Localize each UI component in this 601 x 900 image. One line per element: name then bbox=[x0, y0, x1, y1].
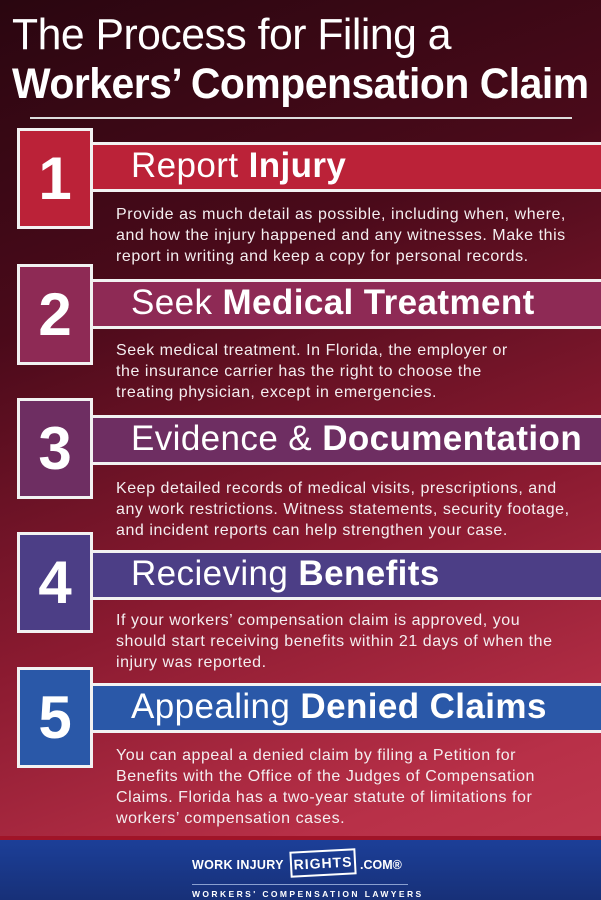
text 3 bbox=[116, 480, 570, 539]
text 5: You can appeal a denied claim by filing a Petition for bbox=[116, 747, 516, 764]
text 3: and incident reports can help strengthen your case. bbox=[116, 522, 508, 539]
number 4 bbox=[17, 532, 93, 633]
step 3 bbox=[17, 398, 601, 539]
text 2: the insurance carrier has the right to choose the bbox=[116, 363, 482, 380]
header bar 2 bbox=[93, 279, 601, 329]
title: Workers’ Compensation Claim bbox=[12, 60, 589, 108]
number 5 bbox=[17, 667, 93, 768]
step 2 bbox=[17, 264, 601, 401]
text 5: Benefits with the Office of the Judges of Compensation bbox=[116, 768, 535, 785]
text 4 bbox=[116, 612, 553, 671]
text 4: injury was reported. bbox=[116, 654, 267, 671]
text 5: Claims. Florida has a two-year statute of limitations for bbox=[116, 789, 532, 806]
text 1 bbox=[116, 206, 566, 265]
text 4: should start receiving benefits within 21 days of when the bbox=[116, 633, 553, 650]
text 5: workers’ compensation cases. bbox=[116, 810, 345, 827]
step 1 bbox=[17, 128, 601, 265]
number 3: 3 bbox=[38, 415, 72, 482]
logo: WORK INJURY bbox=[192, 858, 284, 872]
header bar 1 bbox=[93, 142, 601, 192]
logo: RIGHTS bbox=[293, 853, 353, 873]
header bar 4: Recieving Benefits bbox=[131, 554, 440, 593]
header bar 4 bbox=[93, 550, 601, 600]
number 4: 4 bbox=[38, 549, 72, 616]
header bar 5: Appealing Denied Claims bbox=[131, 687, 547, 726]
header bar 1: Report Injury bbox=[131, 146, 346, 185]
number 5: 5 bbox=[38, 684, 72, 751]
logo bbox=[192, 848, 424, 899]
logo: .COM® bbox=[360, 858, 402, 872]
step 4 bbox=[17, 532, 601, 671]
number 2 bbox=[17, 264, 93, 365]
header bar 5 bbox=[93, 683, 601, 733]
title: The Process for Filing a bbox=[12, 10, 451, 59]
header bar 3: Evidence & Documentation bbox=[131, 419, 582, 458]
number 2: 2 bbox=[38, 281, 72, 348]
number 1: 1 bbox=[38, 145, 72, 212]
header bar 2: Seek Medical Treatment bbox=[131, 283, 535, 322]
text 3: any work restrictions. Witness statements, security footage, bbox=[116, 501, 570, 518]
text 5 bbox=[116, 747, 535, 827]
header bar 3 bbox=[93, 415, 601, 465]
text 3: Keep detailed records of medical visits, prescriptions, and bbox=[116, 480, 557, 497]
step 5 bbox=[17, 667, 601, 827]
number 1 bbox=[17, 128, 93, 229]
text 2: Seek medical treatment. In Florida, the employer or bbox=[116, 342, 508, 359]
footer bbox=[0, 836, 601, 900]
text 1: Provide as much detail as possible, including when, where, bbox=[116, 206, 566, 223]
logo: WORKERS' COMPENSATION LAWYERS bbox=[192, 889, 424, 899]
number 3 bbox=[17, 398, 93, 499]
title bbox=[12, 10, 589, 119]
text 1: report in writing and keep a copy for personal records. bbox=[116, 248, 529, 265]
text 4: If your workers’ compensation claim is approved, you bbox=[116, 612, 520, 629]
text 1: and how the injury happened and any witnesses. Make this bbox=[116, 227, 566, 244]
text 2 bbox=[116, 342, 508, 401]
text 2: treating physician, except in emergencies. bbox=[116, 384, 437, 401]
